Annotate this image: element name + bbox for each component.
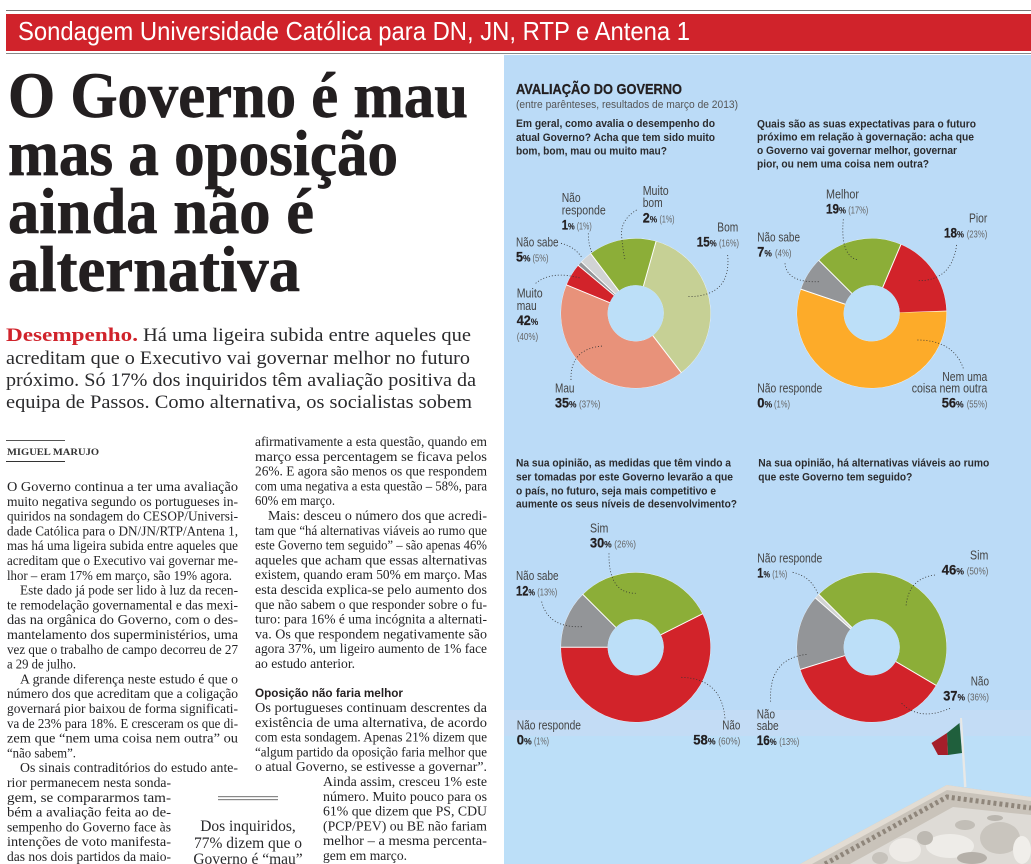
- labels chart 2: Não responde: [757, 382, 822, 396]
- deck paragraph: acreditam que o Executivo vai governar melhor no futuro: [6, 348, 470, 369]
- article column 1: acreditam que o Executivo vai governar me-: [7, 553, 238, 568]
- article column 2: Oposição não faria melhor: [255, 686, 403, 700]
- labels chart 1: Muito: [643, 184, 669, 198]
- article column 2: março essa percentagem se ficava pelos: [255, 449, 487, 464]
- labels chart 4: Não: [971, 675, 989, 689]
- labels chart 4: 37%: [943, 689, 965, 704]
- labels chart 4: 1%: [757, 565, 770, 580]
- deck paragraph: equipa de Passos. Como alternativa, os socialistas sobem: [6, 392, 472, 413]
- labels chart 1: 5%: [516, 250, 530, 265]
- labels chart 1: mau: [517, 299, 537, 313]
- pull quote: [193, 796, 303, 864]
- article column 1: das nos dois partidos da maio-: [7, 849, 171, 864]
- article column 2: melhor – a mesma percenta-: [323, 833, 488, 848]
- main headline: alternativa: [8, 234, 300, 306]
- labels chart 1: (1%): [660, 214, 674, 226]
- donut chart 3: [561, 572, 711, 722]
- article column 2: com uma negativa a esta questão – 58%, para: [255, 478, 487, 493]
- pull quote: Dos inquiridos,: [200, 818, 296, 835]
- article column 2: ao estudo anterior.: [255, 656, 355, 671]
- labels chart 4: (1%): [772, 568, 787, 580]
- labels chart 2: 56%: [942, 396, 964, 411]
- labels chart 3: 12%: [516, 584, 535, 599]
- section title: (entre parênteses, resultados de março de 2013): [516, 99, 738, 111]
- labels chart 2: (55%): [967, 399, 987, 411]
- labels chart 4: (50%): [967, 565, 988, 577]
- labels chart 2: coisa nem outra: [912, 382, 987, 396]
- article column 2: este Governo tem seguido” – são apenas 46%: [255, 538, 487, 553]
- labels chart 2: (23%): [967, 229, 987, 241]
- panel: competitividade: [516, 458, 740, 747]
- article column 2: turo: para 16% é uma incógnita a alternati-: [255, 612, 488, 627]
- question 3: ser tomadas por este Governo levarão a que: [516, 472, 733, 484]
- question 2: Quais são as suas expectativas para o futuro: [757, 118, 976, 130]
- header banner: Sondagem Universidade Católica para DN, JN, RTP e Antena 1: [18, 16, 690, 46]
- labels chart 3: Não: [722, 718, 740, 732]
- labels chart 3: (26%): [614, 539, 636, 551]
- labels chart 3: (13%): [537, 587, 557, 599]
- labels chart 2: Não sabe: [757, 231, 800, 245]
- article column 1: lhor – eram 17% em março, são 19% agora.: [7, 568, 232, 583]
- labels chart 1: responde: [562, 203, 606, 217]
- question 3: o país, no futuro, seja mais competitivo e: [516, 485, 716, 497]
- question 1: atual Governo? Acha que tem sido muito: [516, 132, 715, 144]
- article column 2: “algum partido da oposição faria melhor que: [255, 744, 487, 759]
- labels chart 1: Não: [562, 191, 581, 205]
- labels chart 1: Bom: [717, 221, 738, 235]
- article column 1: a 29 de julho.: [7, 657, 76, 672]
- article column 2: existem, quando eram 50% em março. Mas: [255, 567, 487, 582]
- question 4: que este Governo tem seguido?: [758, 472, 913, 484]
- article column 2: gem em março.: [323, 848, 407, 863]
- article column 1: mantelamento dos superministérios, uma: [7, 627, 238, 642]
- article column 1: mas há uma ligeira subida entre aqueles que: [7, 538, 238, 553]
- article column 1: rior permanecem nesta sonda-: [7, 775, 172, 790]
- article column 2: tam que “há alternativas viáveis ao rumo que: [255, 523, 487, 538]
- labels chart 1: (37%): [579, 399, 600, 411]
- labels chart 2: 19%: [826, 201, 846, 216]
- labels chart 2: Melhor: [826, 187, 859, 201]
- donut chart 4: [797, 572, 947, 722]
- article column 2: esta descida explica-se pelo aumento dos: [255, 582, 487, 597]
- section title: AVALIAÇÃO DO GOVERNO: [516, 80, 682, 98]
- labels chart 2: (1%): [774, 399, 790, 411]
- labels chart 4: (13%): [779, 736, 799, 748]
- question 2: pior, ou nem uma coisa nem outra?: [757, 159, 929, 171]
- main headline: ainda não é: [8, 176, 314, 248]
- article column 1: gem, se compararmos tam-: [7, 790, 172, 805]
- labels chart 4: (36%): [967, 692, 989, 704]
- article column 1: A grande diferença neste estudo é que o: [20, 671, 238, 686]
- main headline: O Governo é mau: [8, 60, 468, 132]
- labels chart 3: (60%): [718, 735, 740, 747]
- labels chart 4: 16%: [757, 733, 777, 748]
- labels chart 3: [516, 522, 740, 747]
- deck paragraph: Desempenho.: [6, 325, 138, 346]
- article column 1: vez que o trabalho de campo decorreu de 27: [7, 642, 238, 657]
- question 2: [757, 118, 976, 171]
- byline: [6, 440, 99, 462]
- donut chart 2: [797, 238, 947, 388]
- labels chart 1: 42%: [517, 313, 538, 328]
- labels chart 4: Não responde: [757, 551, 822, 565]
- article column 1: Os sinais contraditórios do estudo ante-: [20, 760, 239, 775]
- question 3: Na sua opinião, as medidas que têm vindo a: [516, 458, 732, 470]
- article column 2: o atual Governo, se estivesse a governar”.: [255, 759, 487, 774]
- labels chart 1: 2%: [643, 211, 657, 226]
- article column 2: Os portugueses continuam descrentes da: [255, 700, 487, 715]
- article column 2: que não sabem o que responder sobre o fu-: [255, 597, 487, 612]
- labels chart 1: Não sabe: [516, 236, 559, 250]
- panel: desempenho do Governo: [516, 118, 739, 411]
- question 3: aumente os seus níveis de desenvolvimento?: [516, 499, 737, 511]
- panel: alternativas: [757, 458, 990, 748]
- main headline: [8, 60, 468, 306]
- labels chart 4: Sim: [970, 548, 988, 562]
- byline: MIGUEL MARUJO: [7, 448, 99, 458]
- article column 2: afirmativamente a esta questão, quando em: [255, 434, 487, 449]
- labels chart 4: [757, 548, 989, 748]
- question 4: Na sua opinião, há alternativas viáveis ao rumo: [758, 458, 990, 470]
- article column 1: governará pior baixou de forma significati-: [7, 701, 238, 716]
- labels chart 2: (4%): [775, 248, 792, 260]
- labels chart 1: Mau: [555, 382, 575, 396]
- question 1: bom, bom, mau ou muito mau?: [516, 146, 667, 158]
- article column 2: 26%. E agora são menos os que respondem: [255, 464, 487, 479]
- deck paragraph: Há uma ligeira subida entre aqueles que: [143, 325, 471, 346]
- photo: parliament pediment: [800, 785, 1031, 864]
- question 1: [516, 118, 715, 158]
- labels chart 1: 35%: [555, 396, 576, 411]
- article column 2: aqueles que acham que essas alternativas: [255, 552, 487, 567]
- panel: sky background: [504, 55, 1031, 864]
- article column 2: [255, 434, 488, 863]
- labels chart 1: (1%): [577, 220, 592, 232]
- labels chart 1: 15%: [697, 235, 717, 250]
- labels chart 3: 58%: [693, 732, 716, 747]
- deck paragraph: [6, 325, 477, 413]
- labels chart 3: Não responde: [517, 718, 581, 732]
- article column 1: bém a avaliação feita ao de-: [7, 805, 172, 820]
- article column 2: 61% que dizem que PS, CDU: [323, 804, 487, 819]
- article column 1: das na orgânica do Governo, com o des-: [7, 612, 239, 627]
- labels chart 2: 18%: [944, 226, 964, 241]
- article column 1: muito negativa segundo os portugueses in-: [7, 494, 238, 509]
- labels chart 1: (40%): [517, 331, 538, 343]
- article column 2: número. Muito pouco para os: [323, 789, 487, 804]
- article column 2: existência de uma alternativa, de acordo: [255, 715, 487, 730]
- labels chart 2: 7%: [757, 245, 772, 260]
- question 1: Em geral, como avalia o desempenho do: [516, 118, 715, 130]
- deck paragraph: próximo. Só 17% dos inquiridos têm avaliação positiva da: [6, 370, 477, 391]
- section title: [516, 80, 738, 111]
- article column 2: va. Os que respondem negativamente são: [255, 626, 487, 641]
- labels chart 2: 0%: [757, 396, 772, 411]
- question 2: o Governo vai governar melhor, governar: [757, 145, 958, 157]
- labels chart 2: Nem uma: [942, 370, 987, 384]
- labels chart 1: 1%: [562, 217, 575, 232]
- article column 1: zem que “nem uma coisa nem outra” ou: [7, 731, 238, 746]
- article column 2: agora 37%, um ligeiro aumento de 1% face: [255, 641, 487, 656]
- article column 1: “não sabem”.: [7, 745, 76, 760]
- labels chart 3: 0%: [517, 732, 532, 747]
- article column 1: [7, 479, 239, 864]
- labels chart 1: [516, 184, 739, 411]
- labels chart 1: (5%): [532, 253, 548, 265]
- labels chart 2: (17%): [848, 204, 868, 216]
- labels chart 2: Pior: [969, 212, 987, 226]
- labels chart 3: Não sabe: [516, 569, 559, 583]
- article column 1: dade Católica para o DN/JN/RTP/Antena 1,: [7, 523, 238, 538]
- article column 1: O Governo continua a ter uma avaliação: [7, 479, 238, 494]
- article column 2: (PCP/PEV) ou BE não fariam: [323, 818, 487, 833]
- article column 2: 60% em março.: [255, 493, 335, 508]
- labels chart 1: bom: [643, 196, 663, 210]
- article column 1: intenções de voto manifesta-: [7, 834, 172, 849]
- article column 1: quiridos na sondagem do CESOP/Universi-: [7, 509, 238, 524]
- labels chart 3: (1%): [534, 735, 549, 747]
- donut chart 1: [561, 238, 711, 388]
- labels chart 3: Sim: [590, 522, 608, 536]
- question 2: próximo em relação à governação: acha que: [757, 132, 974, 144]
- article column 1: número dos que acreditam que a coligação: [7, 686, 238, 701]
- article column 1: va de 23% para 18%. E cresceram os que di-: [7, 716, 238, 731]
- main headline: mas a oposição: [8, 118, 398, 190]
- labels chart 1: (16%): [719, 238, 739, 250]
- pull quote: 77% dizem que o: [194, 835, 302, 852]
- icon: flag on pole: [932, 718, 966, 787]
- article column 1: te remodelação governamental e das mexi-: [7, 597, 238, 612]
- labels chart 2: [757, 187, 987, 411]
- article column 2: com esta sondagem. Apenas 21% dizem que: [255, 730, 487, 745]
- article column 1: sempenho do Governo face às: [7, 819, 171, 834]
- header banner: [6, 14, 1031, 51]
- labels chart 1: Muito: [517, 287, 543, 301]
- panel: expectativas: [757, 118, 987, 411]
- question 3: [516, 458, 737, 511]
- labels chart 4: Não: [757, 707, 775, 721]
- question 4: [758, 458, 990, 484]
- article column 1: Este dado já pode ser lido à luz da recen-: [20, 583, 238, 598]
- article column 2: Mais: desceu o número dos que acredi-: [268, 508, 488, 523]
- labels chart 3: 30%: [590, 536, 612, 551]
- labels chart 4: sabe: [757, 719, 779, 733]
- article column 2: Ainda assim, cresceu 1% este: [323, 774, 487, 789]
- labels chart 4: 46%: [942, 562, 964, 577]
